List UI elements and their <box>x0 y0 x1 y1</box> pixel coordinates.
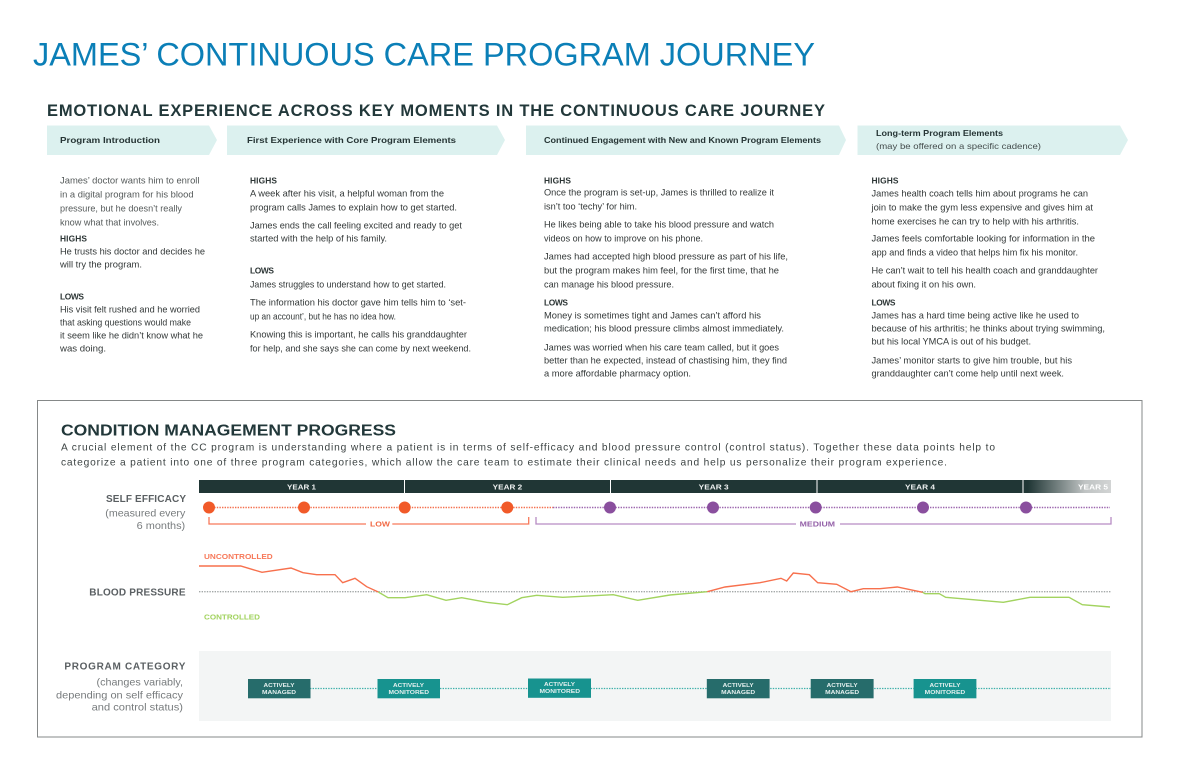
category box: actively monitored <box>914 679 976 698</box>
bracket: medium <box>536 517 1111 528</box>
text column: continued engagement: Money is sometimes tight and James can’t afford his <box>544 310 761 320</box>
text column: continued engagement: LOWS <box>544 297 568 307</box>
category box: actively managed: ACTIVELY <box>264 683 295 689</box>
text column: program introduction <box>59 175 205 353</box>
label: program category: and control status) <box>92 702 183 714</box>
category box: actively monitored <box>528 678 591 698</box>
stage chevron: long-term: (may be offered on a specific cadence) <box>876 142 1041 151</box>
text column: long-term <box>870 175 1105 378</box>
category box: actively monitored: ACTIVELY <box>930 683 961 689</box>
text column: long-term: James’ monitor starts to give him trouble, but his <box>872 355 1072 365</box>
stage chevron: program introduction: Program Introduction <box>60 136 160 145</box>
label: program category: depending on self efficacy <box>56 689 184 701</box>
category box: actively managed: MANAGED <box>721 690 755 696</box>
text column: first experience: LOWS <box>250 265 274 275</box>
text column: long-term: James health coach tells him about programs he can <box>872 188 1088 198</box>
text column: continued engagement: but the program makes him feel, for the first time, that he <box>544 265 779 275</box>
text column: long-term: but his local YMCA is out of his budget. <box>872 336 1031 346</box>
stage chevron: long-term <box>858 126 1128 155</box>
text column: continued engagement <box>544 175 788 378</box>
text column: continued engagement: James was worried when his care team called, but it goes <box>544 342 779 352</box>
stage chevron: continued engagement: Continued Engagement with New and Known Program Elements <box>544 136 821 145</box>
text column: long-term: HIGHS <box>872 175 899 185</box>
text column: continued engagement: better than he expected, instead of chastising him, they find <box>544 355 787 365</box>
category box: actively managed <box>248 679 310 698</box>
label: self efficacy: 6 months) <box>137 520 185 532</box>
text column: first experience: Knowing this is important, he calls his granddaughter <box>250 329 467 339</box>
text column: long-term: about fixing it on his own. <box>872 279 976 289</box>
description paragraph: A crucial element of the CC program is understanding where a patient is in terms of self-efficacy and blood pressure control (control status). Together these data points help to <box>61 443 995 454</box>
text column: program introduction: James’ doctor wants him to enroll <box>60 175 200 185</box>
year timeline bar: YEAR 3 <box>699 482 729 491</box>
text column: long-term: He can’t wait to tell his health coach and granddaughter <box>872 265 1098 275</box>
year timeline bar: YEAR 2 <box>493 482 522 491</box>
text column: program introduction: that asking questions would make <box>60 317 191 327</box>
category box: actively managed <box>707 679 770 698</box>
stage chevron: first experience: First Experience with Core Program Elements <box>247 136 457 145</box>
text column: continued engagement: a more affordable pharmacy option. <box>544 368 691 378</box>
category box: actively managed: MANAGED <box>262 690 296 696</box>
description paragraph <box>61 443 995 469</box>
text column: program introduction: He trusts his doctor and decides he <box>60 246 205 256</box>
text column: first experience <box>250 175 471 353</box>
year timeline bar <box>199 480 1111 493</box>
text column: continued engagement: can manage his blood pressure. <box>544 279 674 289</box>
text column: continued engagement: isn’t too ‘techy’ for him. <box>544 201 637 211</box>
stage chevron: continued engagement <box>526 126 846 155</box>
title: JAMES’ CONTINUOUS CARE PROGRAM JOURNEY <box>33 37 815 73</box>
category box: actively monitored: ACTIVELY <box>544 682 575 688</box>
label: blood pressure: BLOOD PRESSURE <box>89 588 186 598</box>
text column: first experience: started with the help of his family. <box>250 233 387 243</box>
category box: actively monitored: ACTIVELY <box>393 683 424 689</box>
text column: first experience: up an account’, but he has no idea how. <box>250 311 396 321</box>
text column: program introduction: HIGHS <box>60 233 87 243</box>
bracket: low: LOW <box>370 519 391 528</box>
category box: actively monitored <box>378 679 440 698</box>
text column: long-term: James has a hard time being active like he used to <box>872 310 1079 320</box>
text column: continued engagement: videos on how to improve on his phone. <box>544 233 703 243</box>
label: self efficacy <box>105 494 186 532</box>
text column: continued engagement: Once the program is set-up, James is thrilled to realize it <box>544 187 774 197</box>
blood pressure line chart: CONTROLLED <box>204 612 261 622</box>
year timeline bar: YEAR 5 <box>1078 482 1109 491</box>
category box: actively managed: ACTIVELY <box>723 683 754 689</box>
text column: long-term: James feels comfortable looking for information in the <box>872 233 1095 243</box>
category box: actively monitored: MONITORED <box>925 690 965 696</box>
text column: program introduction: pressure, but he doesn’t really <box>60 203 182 213</box>
text column: first experience: A week after his visit, a helpful woman from the <box>250 188 444 198</box>
text column: long-term: app and finds a video that helps him fix his monitor. <box>872 247 1078 257</box>
text column: continued engagement: James had accepted high blood pressure as part of his life, <box>544 251 788 261</box>
text column: program introduction: it seem like he didn’t know what he <box>60 330 203 340</box>
description paragraph: categorize a patient into one of three program categories, which allow the care team to estimate their clinical needs and help us personalize their program experience. <box>61 458 947 469</box>
text column: continued engagement: medication; his blood pressure climbs almost immediately. <box>544 323 784 333</box>
text column: first experience: James ends the call feeling excited and ready to get <box>250 220 462 230</box>
text column: program introduction: know what that involves. <box>60 217 159 227</box>
text column: first experience: The information his doctor gave him tells him to ‘set- <box>250 297 466 307</box>
blood pressure line chart <box>199 552 1111 622</box>
text column: program introduction: will try the program. <box>59 259 142 269</box>
text column: continued engagement: He likes being able to take his blood pressure and watch <box>544 219 774 229</box>
category box: actively monitored: MONITORED <box>540 689 580 695</box>
category box: actively managed: MANAGED <box>825 690 859 696</box>
text column: long-term: LOWS <box>872 297 896 307</box>
panel: condition management progress <box>38 400 1142 737</box>
self efficacy dot timeline <box>203 502 1110 514</box>
text column: long-term: because of his arthritis; he thinks about trying swimming, <box>872 323 1105 333</box>
text column: first experience: HIGHS <box>250 175 277 185</box>
text column: first experience: for help, and she says she can come by next weekend. <box>250 343 471 353</box>
blood pressure line chart: UNCONTROLLED <box>204 552 273 561</box>
category box: actively monitored: MONITORED <box>388 690 429 696</box>
stage chevron: long-term: Long-term Program Elements <box>876 129 1003 138</box>
text column: program introduction: His visit felt rushed and he worried <box>60 304 200 314</box>
text column: first experience: program calls James to explain how to get started. <box>250 202 457 212</box>
label: self efficacy: SELF EFFICACY <box>106 494 186 505</box>
text column: long-term: join to make the gym less expensive and gives him at <box>870 202 1093 212</box>
label: self efficacy: (measured every <box>105 508 186 520</box>
category box: actively managed <box>811 679 874 698</box>
year timeline bar: YEAR 4 <box>905 482 936 491</box>
bracket: medium: MEDIUM <box>800 519 835 528</box>
bracket: low <box>209 517 529 528</box>
text column: long-term: home exercises he can try to help with his arthritis. <box>872 216 1079 226</box>
text column: first experience: James struggles to understand how to get started. <box>250 279 446 289</box>
text column: program introduction: in a digital program for his blood <box>60 189 194 199</box>
stage chevron: program introduction <box>47 126 217 155</box>
stage chevron: first experience <box>227 126 505 155</box>
label: program category: PROGRAM CATEGORY <box>64 662 186 672</box>
heading: emotional experience: EMOTIONAL EXPERIENCE ACROSS KEY MOMENTS IN THE CONTINUOUS CARE JOURNEY <box>47 102 825 120</box>
text column: program introduction: was doing. <box>59 343 106 353</box>
heading: condition management: CONDITION MANAGEMENT PROGRESS <box>61 423 396 440</box>
year timeline bar: YEAR 1 <box>287 482 317 491</box>
program category track <box>199 651 1111 721</box>
text column: long-term: granddaughter can’t come help until next week. <box>872 368 1064 378</box>
label: program category: (changes variably, <box>96 677 183 689</box>
label: program category <box>56 662 186 714</box>
text column: program introduction: LOWS <box>60 291 84 301</box>
category box: actively managed: ACTIVELY <box>827 683 858 689</box>
text column: continued engagement: HIGHS <box>544 175 571 185</box>
